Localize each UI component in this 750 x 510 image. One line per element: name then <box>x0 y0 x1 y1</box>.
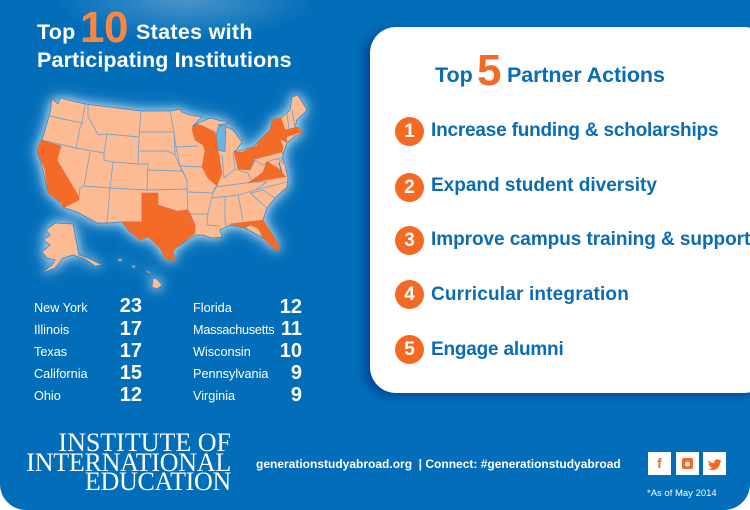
state list left column: 12 <box>120 384 142 406</box>
action 1 <box>395 117 718 146</box>
state list right column: 10 <box>280 340 302 362</box>
icon: facebook: f <box>657 455 662 471</box>
heading: top 10 states: 10 <box>80 3 128 52</box>
state list right column: Florida <box>193 301 232 315</box>
logo: Institute of International Education: INTERNATIONAL <box>26 448 231 476</box>
state list right column: Wisconsin <box>193 345 251 359</box>
logo: Institute of International Education: INSTITUTE OF <box>58 428 231 457</box>
california <box>37 140 79 208</box>
ohio <box>234 147 255 170</box>
heading: top 5: 5 <box>477 46 501 95</box>
action 3: 3 <box>404 230 415 251</box>
action 4: Curricular integration <box>431 284 629 305</box>
florida <box>230 220 279 252</box>
state list right column: 9 <box>291 384 302 406</box>
texas <box>122 193 195 261</box>
icon: instagram <box>676 452 699 475</box>
panel: top 5 partner actions <box>370 27 750 393</box>
state list right column <box>193 296 302 406</box>
action 4: 4 <box>404 284 415 305</box>
state list right column: Massachusetts <box>193 323 274 337</box>
action 5: Engage alumni <box>431 339 564 360</box>
heading: top 5: Partner Actions <box>507 63 665 87</box>
state list right column: 11 <box>281 318 302 340</box>
lake michigan <box>216 125 226 152</box>
action 1: 1 <box>404 121 415 142</box>
state list right column: 12 <box>280 296 302 318</box>
footnote: *As of May 2014 <box>647 488 717 499</box>
heading: top 10 states: Top <box>37 20 75 44</box>
heading: top 10 states <box>37 3 292 72</box>
state list left column: New York <box>34 301 88 315</box>
highlighted states <box>37 118 303 261</box>
land silhouette <box>37 95 307 289</box>
action 5: 5 <box>404 339 415 360</box>
state list right column: Pennsylvania <box>193 367 268 381</box>
state list left column: California <box>34 367 88 381</box>
state list right column: Virginia <box>193 389 235 403</box>
wisconsin <box>192 124 218 151</box>
action 5 <box>395 335 564 364</box>
virginia <box>248 161 286 183</box>
icon: twitter <box>703 452 726 475</box>
action 2 <box>395 173 657 202</box>
action 3: Improve campus training & support <box>431 229 750 250</box>
pennsylvania <box>253 139 283 159</box>
icon: facebook <box>648 452 671 475</box>
logo: Institute of International Education: EDUCATION <box>85 467 231 496</box>
heading: top 10 states: Participating Institutions <box>37 48 292 72</box>
state list left column: 17 <box>120 340 142 362</box>
state list left column <box>34 295 142 406</box>
website and hashtag: generationstudyabroad.org | Connect: #generationstudyabroad <box>256 457 621 471</box>
chesapeake bay <box>279 162 283 176</box>
state list left column: 23 <box>120 295 142 317</box>
new york <box>257 118 287 145</box>
action 3 <box>395 226 750 255</box>
state borders <box>41 104 295 228</box>
state list right column: 9 <box>291 362 302 384</box>
action 2: Expand student diversity <box>431 175 657 196</box>
heading: top 10 states: States with <box>136 20 253 44</box>
logo: Institute of International Education <box>26 428 231 496</box>
hawaii <box>118 259 162 289</box>
alaska <box>42 223 102 273</box>
state list left column: Texas <box>34 345 67 359</box>
state list left column: 17 <box>120 318 142 340</box>
state list left column: Ohio <box>34 389 61 403</box>
massachusetts <box>285 127 303 137</box>
map of United States <box>26 86 316 298</box>
action 2: 2 <box>404 177 415 198</box>
state list left column: 15 <box>120 362 142 384</box>
heading: top 5 <box>435 46 665 95</box>
illinois <box>202 150 222 186</box>
action 4 <box>395 280 629 309</box>
action 1: Increase funding & scholarships <box>431 120 718 141</box>
state list left column: Illinois <box>34 323 69 337</box>
heading: top 5: Top <box>435 63 473 87</box>
